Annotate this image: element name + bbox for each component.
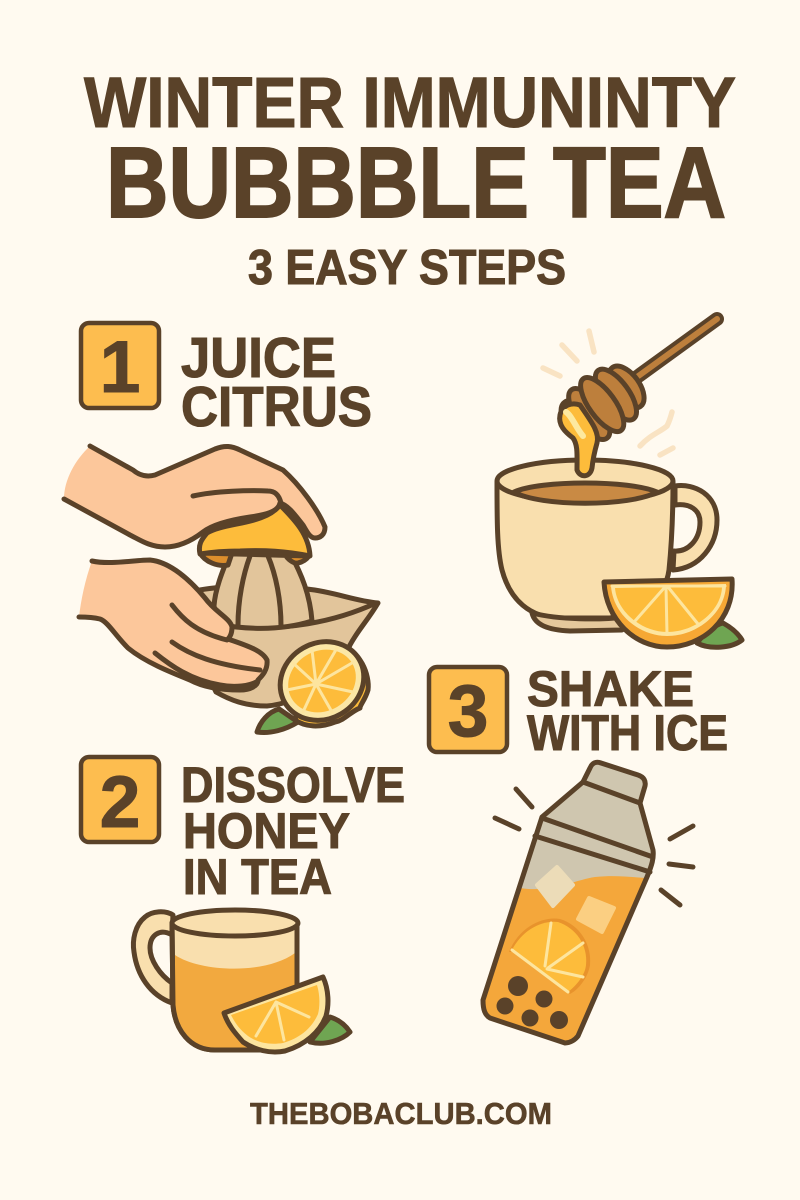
- saucer foot: [532, 613, 625, 631]
- step 3 badge: [429, 667, 507, 752]
- shaker outline: [483, 782, 653, 1043]
- mug handle: [673, 486, 717, 570]
- mug body: [172, 923, 297, 1050]
- lemon wedge: [224, 977, 328, 1052]
- shaker bands: [535, 818, 653, 872]
- shaker cap: [583, 762, 645, 803]
- ice cubes: [537, 867, 573, 906]
- leaf: [257, 709, 298, 733]
- mug body: [497, 482, 673, 618]
- tea in mug: [175, 953, 295, 1048]
- shaker body fill: [483, 782, 653, 1043]
- illustration: hands juicing citrus: [64, 446, 378, 735]
- sparkle lines: [543, 331, 673, 455]
- step 3 heading: SHAKE: [527, 661, 694, 717]
- step 3 badge: 3: [448, 671, 488, 752]
- step 1 badge: 1: [100, 327, 140, 408]
- step 2 badge: [81, 757, 159, 843]
- step 2 heading: HONEY: [183, 803, 350, 859]
- bowl rim: [233, 603, 376, 627]
- step 1 badge: [81, 323, 159, 408]
- juicer bowl: [196, 586, 378, 706]
- leaf: [697, 623, 742, 647]
- dipper handle: [637, 319, 717, 377]
- step 3 heading: [527, 661, 728, 761]
- dipper head: [549, 353, 656, 455]
- rim of lemon half: [200, 553, 309, 565]
- step 2 heading: IN TEA: [183, 849, 332, 905]
- lemon wedge: [604, 579, 732, 647]
- step 2 heading: DISSOLVE: [181, 757, 405, 813]
- mug rim: [497, 460, 673, 502]
- illustration: cocktail shaker with boba: [483, 762, 693, 1043]
- reamer cone: [214, 553, 312, 628]
- step 2 badge: 2: [100, 762, 140, 843]
- step 1 heading: JUICE: [181, 326, 336, 390]
- title line: Winter Immuninty: WINTER IMMUNINTY: [84, 64, 736, 143]
- subtitle: 3 EASY STEPS: [248, 241, 566, 295]
- tea surface: [514, 483, 657, 503]
- leaf: [310, 1017, 350, 1043]
- step 1 heading: CITRUS: [181, 375, 372, 439]
- mug rim: [172, 910, 298, 936]
- illustration: honey dipper over cup: [497, 319, 742, 647]
- lemon half on reamer: [199, 505, 310, 556]
- tapioca pearls: [496, 976, 568, 1029]
- footer url: THEBOBACLUB.COM: [250, 1096, 552, 1131]
- lower hand: [79, 560, 267, 690]
- lemon cut face: [266, 627, 378, 735]
- illustration: mug of tea with lemon: [133, 910, 350, 1052]
- mug handle: [133, 912, 173, 1003]
- orange slice: [509, 918, 590, 994]
- motion lines: [495, 789, 693, 905]
- honey drip: [560, 404, 598, 476]
- upper hand: [64, 446, 325, 547]
- liquid: [483, 876, 646, 1043]
- step 2 heading: [181, 757, 405, 905]
- whole lemon back: [295, 645, 368, 726]
- step 1 heading: [181, 326, 372, 439]
- step 3 heading: WITH ICE: [527, 705, 728, 761]
